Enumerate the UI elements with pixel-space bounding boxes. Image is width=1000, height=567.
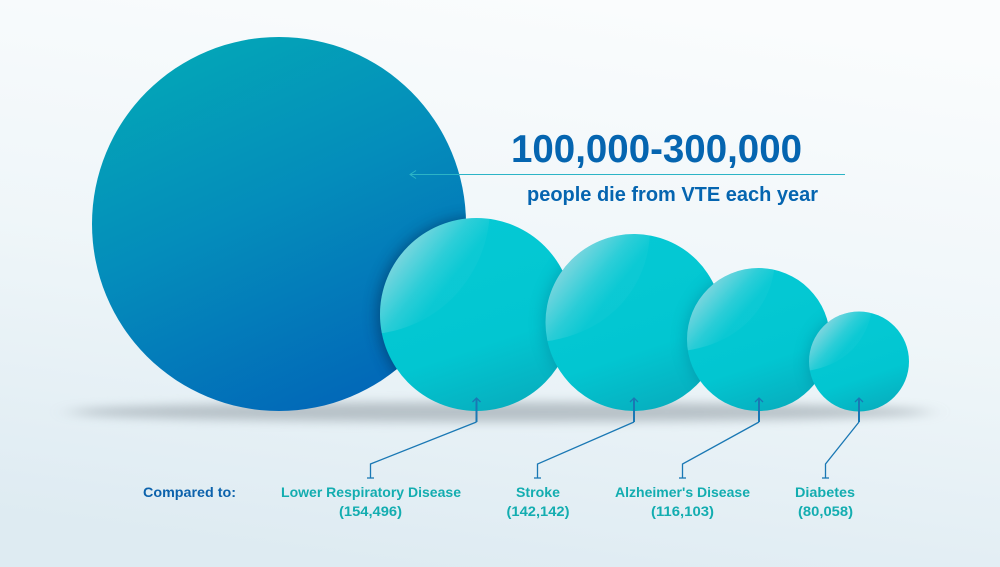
circle: alzheimer's disease (683, 262, 830, 411)
callout arrow to large circle (410, 170, 845, 178)
circle: lower respiratory disease (380, 218, 562, 411)
label: stroke: Stroke (516, 484, 560, 500)
large circle: VTE deaths (92, 37, 466, 411)
leader arrow: stroke (534, 398, 638, 478)
label: alzheimer's disease: Alzheimer's Disease (615, 484, 750, 500)
label: lower respiratory disease (281, 484, 461, 519)
ground shadow (70, 402, 930, 422)
circle: diabetes (806, 308, 909, 412)
leader arrow: lower respiratory disease (367, 398, 480, 478)
leader arrow: alzheimer's disease (679, 398, 763, 478)
label: lower respiratory disease: Lower Respiratory Disease (281, 484, 461, 500)
compared to label: Compared to: (143, 484, 236, 500)
label: lower respiratory disease: (154,496) (339, 503, 402, 519)
label: alzheimer's disease: (116,103) (651, 503, 714, 519)
leader arrow: diabetes (822, 398, 863, 478)
headline figure: 100,000-300,000 (511, 128, 802, 171)
label: stroke: (142,142) (506, 503, 570, 519)
label: stroke (506, 484, 570, 519)
subheading: people die from VTE each year (527, 184, 818, 206)
label: alzheimer's disease (615, 484, 750, 519)
circle: stroke (540, 228, 722, 411)
label: diabetes: Diabetes (795, 484, 855, 500)
label: diabetes: (80,058) (798, 503, 853, 519)
label: diabetes (795, 484, 855, 519)
